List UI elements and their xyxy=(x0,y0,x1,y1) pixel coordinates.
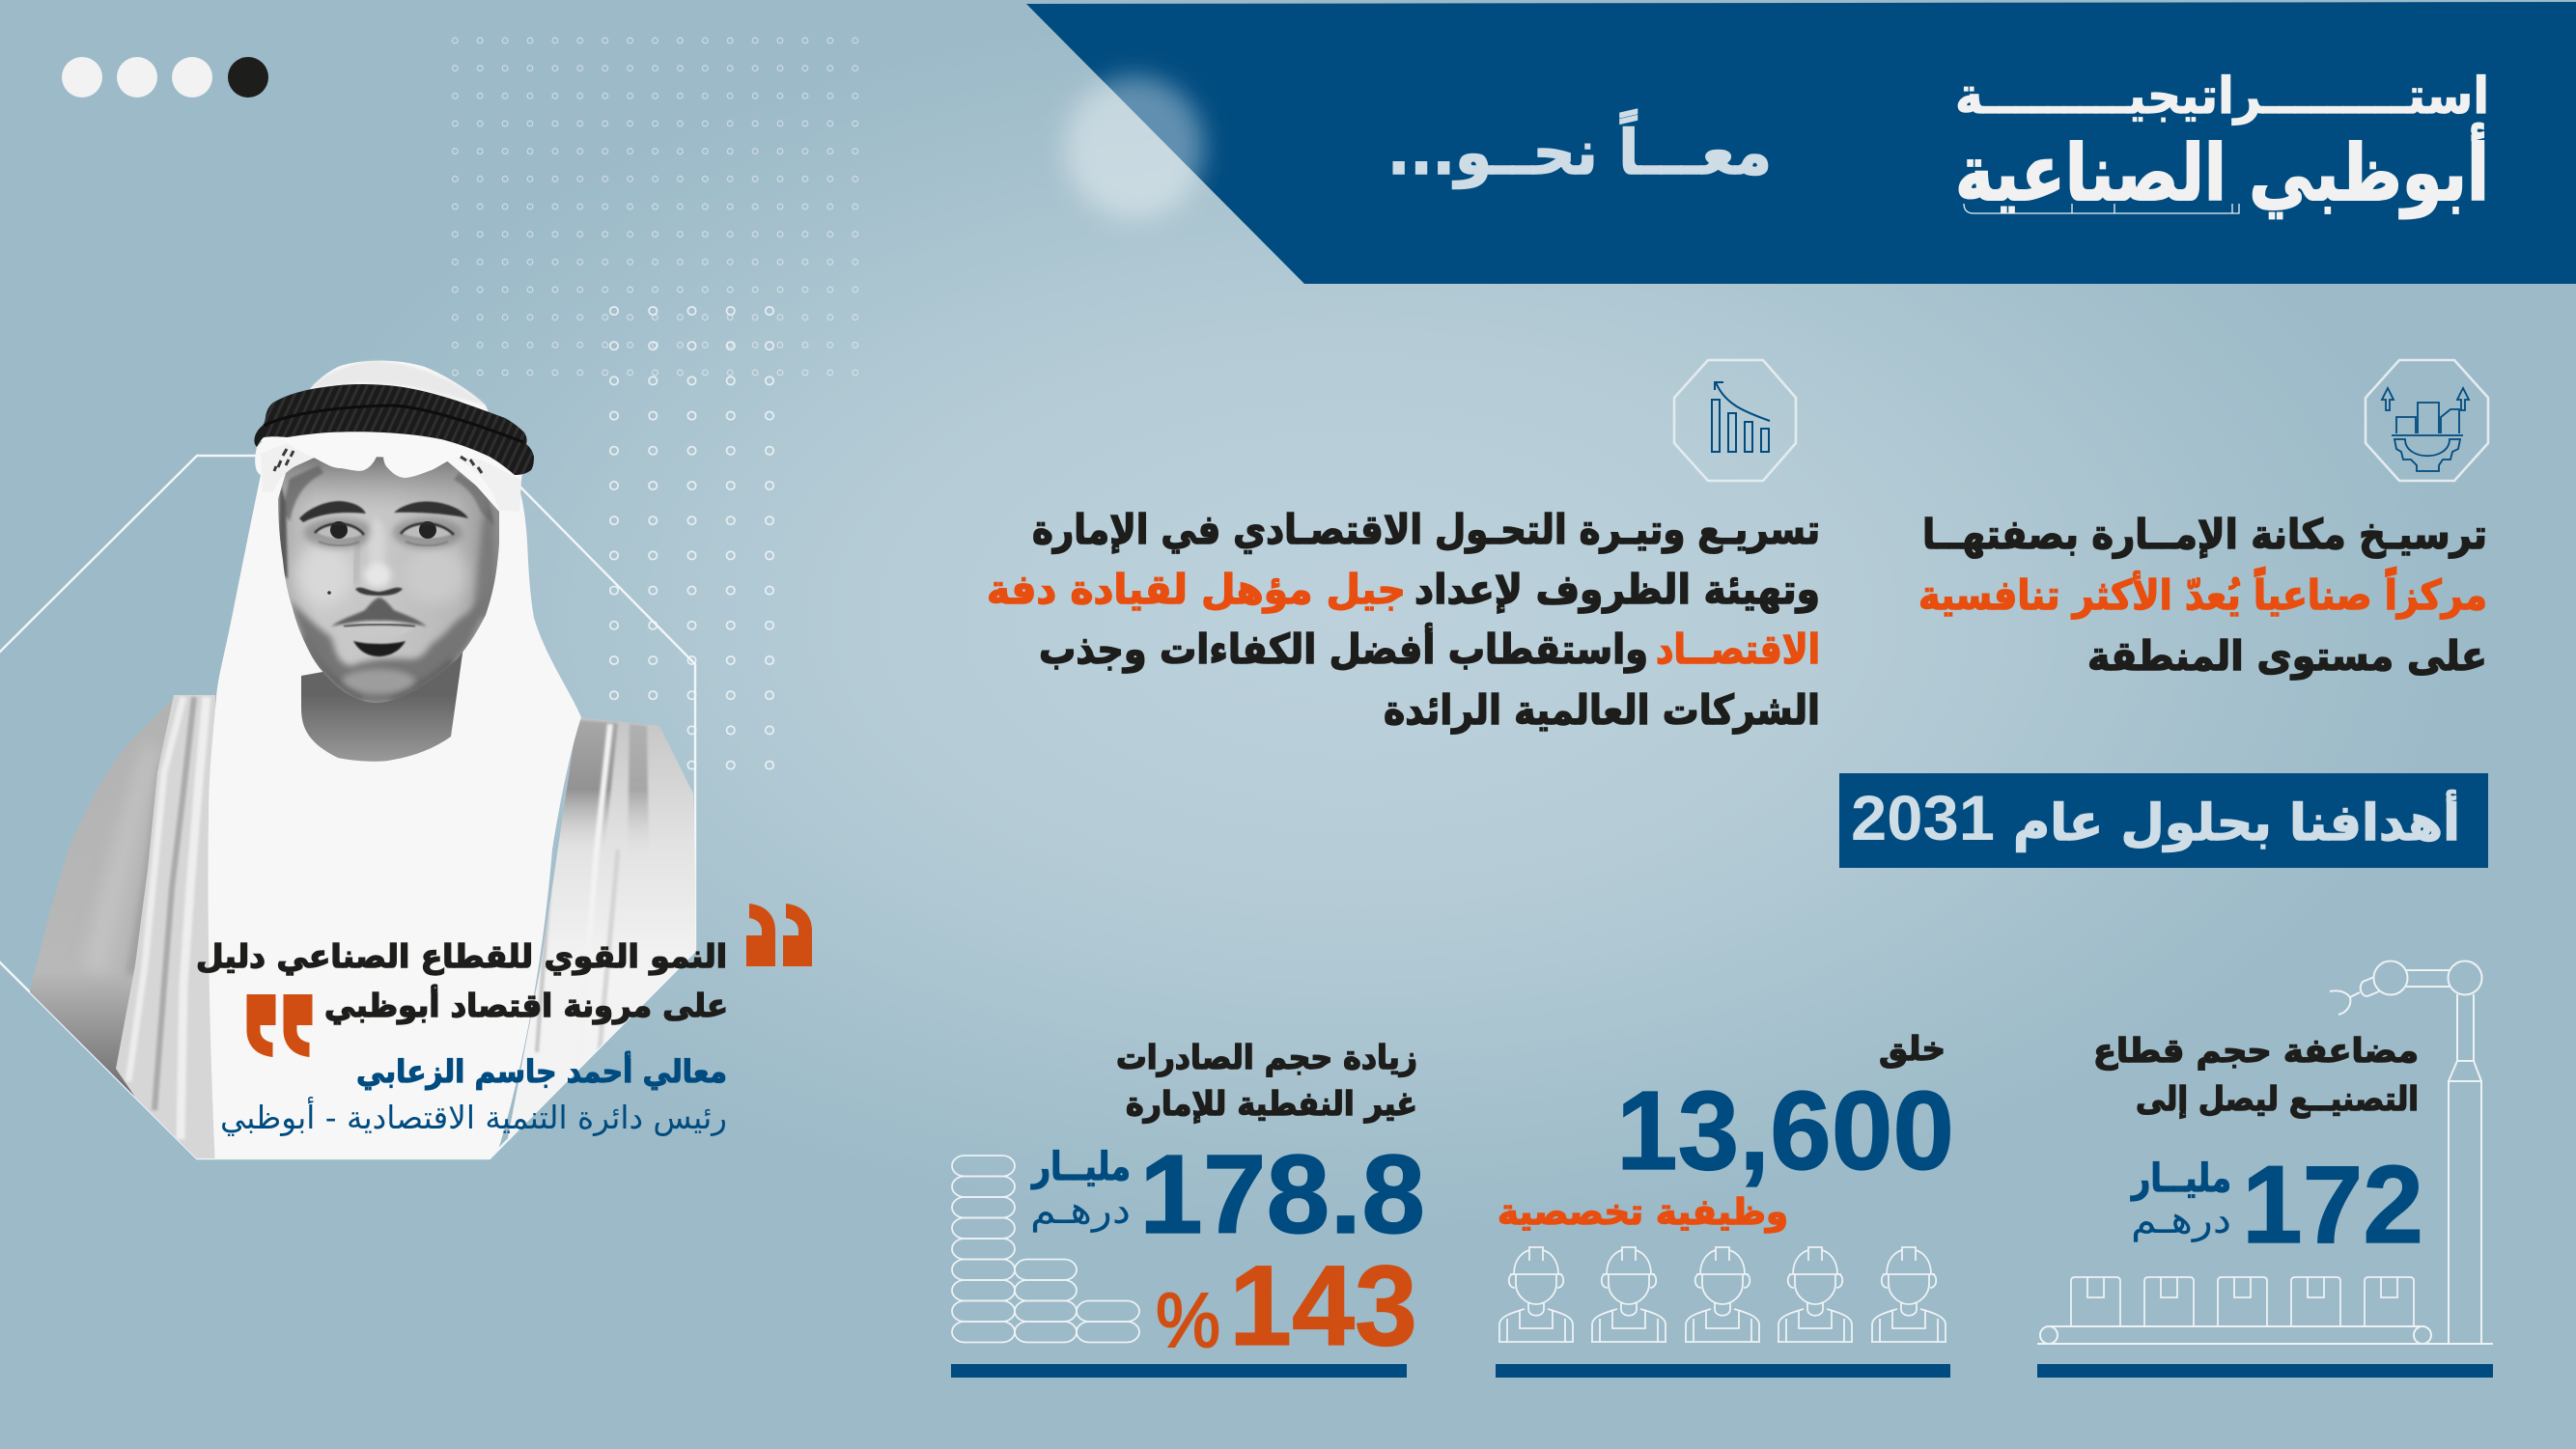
nose xyxy=(354,518,403,596)
text: objective one: على مستوى المنطقة xyxy=(2087,632,2487,681)
speaker name: معالي أحمد جاسم الزعابي xyxy=(356,1051,727,1090)
text: exports goal xyxy=(1116,1039,1417,1124)
closing quote mark xyxy=(746,904,812,966)
text: objective one xyxy=(1918,511,2487,681)
text: objective two xyxy=(987,506,1820,735)
text: specialised jobs: وظيفية تخصصية xyxy=(1498,1191,1788,1233)
ghutra stitch marks xyxy=(274,449,482,473)
quote text: النمو القوي للقطاع الصناعي دليل xyxy=(196,937,727,976)
title: Abu Dhabi industrial strategy: أبوظبي الصناعية xyxy=(1955,124,2489,219)
ghutra and white kandura xyxy=(208,361,581,1168)
text: objective two: واستقطاب أفضل الكفاءات وجذب xyxy=(1039,623,1648,674)
header banner xyxy=(1026,2,2576,284)
number: 172 billion dirhams: درهـم xyxy=(2131,1198,2231,1242)
soft light glow xyxy=(1065,76,1204,219)
heading: our goals by 2031: 2031 xyxy=(1851,782,1995,853)
text: objective two: جيل مؤهل لقيادة دفة xyxy=(987,566,1406,614)
icon: bar chart with arrow xyxy=(1674,360,1796,481)
face shading xyxy=(270,454,507,705)
moustache xyxy=(331,598,427,627)
agal head band xyxy=(254,384,534,475)
face xyxy=(278,456,499,703)
number: 172 billion dirhams: مليــار xyxy=(2130,1156,2231,1201)
number: 178.8 billion dirhams: 178.8 xyxy=(1139,1131,1425,1257)
quote text: على مرونة اقتصاد أبوظبي xyxy=(324,985,728,1025)
number: 172 billion dirhams xyxy=(2130,1144,2423,1267)
text: manufacturing goal xyxy=(2093,1032,2419,1119)
text: objective two: تسريـع وتيـرة التحـول الاقتصـادي في الإمارة xyxy=(1032,506,1820,554)
number: 13,600: 13,600 xyxy=(1616,1068,1954,1193)
title: Abu Dhabi industrial strategy: استـــــــــراتيجيـــــــــة xyxy=(1955,68,2489,125)
number: 178.8 billion dirhams: مليــار xyxy=(1030,1145,1131,1189)
bar xyxy=(951,1364,1407,1378)
quote block xyxy=(196,904,812,1136)
octagon outline xyxy=(0,456,695,1158)
eyes xyxy=(315,521,454,595)
heading: our goals by 2031 xyxy=(1839,773,2488,868)
icons: five workers xyxy=(1498,1247,1946,1342)
banner slogan: معـــاً نحــو... xyxy=(1387,109,1772,189)
portrait xyxy=(27,361,697,1168)
panel: industrial hub objective xyxy=(1918,360,2488,681)
panel: exports goal xyxy=(951,1039,1425,1378)
panel: jobs goal xyxy=(1496,1030,1954,1378)
bar xyxy=(2037,1364,2493,1378)
icon: stacked coins xyxy=(952,1156,1139,1342)
number: 172 billion dirhams: 172 xyxy=(2242,1144,2423,1267)
text: objective one: ترسيـخ مكانة الإمــارة بصفتهــا xyxy=(1922,511,2487,559)
left sleeve xyxy=(27,695,227,1168)
icon: factory gear xyxy=(2366,360,2488,481)
right shoulder xyxy=(508,718,695,1139)
text: objective two: الاقتصــاد xyxy=(1656,626,1820,673)
right robe fringe xyxy=(534,719,649,1053)
ghutra inner band xyxy=(286,465,521,494)
text: objective one: مركزاً صناعياً يُعدّ الأكثر تنافسية xyxy=(1918,567,2487,620)
ghutra crown texture xyxy=(311,361,486,405)
quote text xyxy=(196,937,728,1025)
dot grid pattern xyxy=(449,35,863,772)
opening quote mark xyxy=(247,994,313,1057)
soul patch xyxy=(353,641,406,656)
text: objective two: وتهيئة الظروف لإعداد xyxy=(1414,566,1820,614)
text: manufacturing goal: التصنيــع ليصل إلى xyxy=(2136,1080,2419,1119)
neck xyxy=(301,647,463,762)
panel: manufacturing goal xyxy=(2037,961,2493,1378)
beard xyxy=(291,600,483,703)
bar xyxy=(1496,1364,1950,1378)
left robe fringe xyxy=(116,695,215,1168)
speaker title: رئيس دائرة التنمية الاقتصادية - أبوظبي xyxy=(220,1097,727,1136)
panel: economic transformation objective xyxy=(987,360,1820,735)
text: exports goal: زيادة حجم الصادرات xyxy=(1116,1039,1417,1077)
text: objective two: الشركات العالمية الرائدة xyxy=(1384,686,1820,735)
text: exports goal: غير النفطية للإمارة xyxy=(1126,1085,1417,1124)
page indicator dots xyxy=(62,57,268,98)
number: 178.8 billion dirhams: درهـم xyxy=(1030,1188,1131,1233)
number: 143 percent: 143 xyxy=(1229,1242,1417,1370)
heading: our goals by 2031: أهدافنا بحلول عام xyxy=(2013,790,2460,852)
ghutra front fold xyxy=(261,436,522,480)
title: Abu Dhabi industrial strategy xyxy=(1955,68,2489,219)
eyebrows xyxy=(299,501,468,522)
illustration: robot arm and conveyor xyxy=(2037,961,2493,1344)
lips xyxy=(347,623,413,637)
number: 143 percent: % xyxy=(1156,1277,1220,1363)
text: manufacturing goal: مضاعفة حجم قطاع xyxy=(2093,1032,2419,1071)
text: create: خلق xyxy=(1879,1030,1946,1069)
